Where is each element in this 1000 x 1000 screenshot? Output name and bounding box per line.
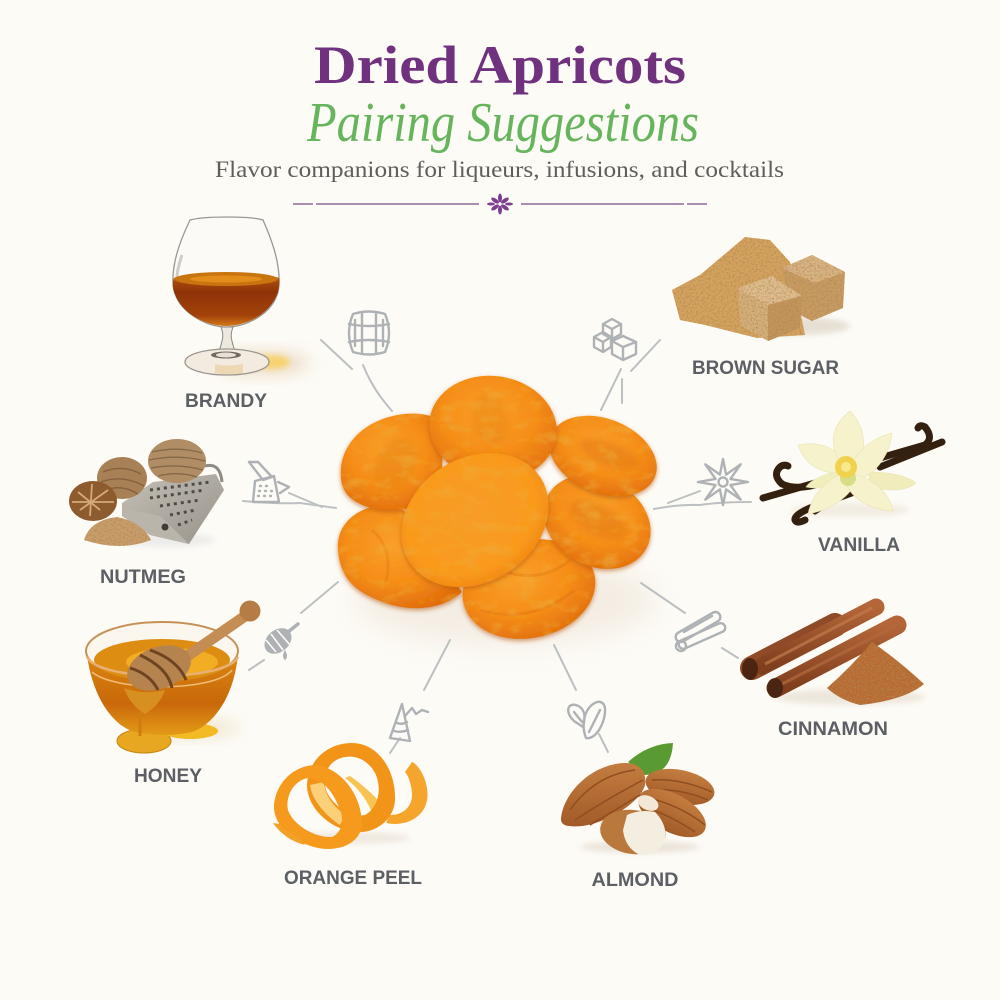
connector lines [243,340,751,753]
ornamental divider [293,194,707,214]
icon: sugar cubes [594,319,636,360]
vanilla pods [763,426,942,522]
front loop [274,765,362,849]
almond back right [642,763,718,811]
apricot: top [422,368,564,488]
nutmeg powder [84,517,151,546]
brown sugar [672,237,850,341]
vanilla petals [798,411,916,514]
label: almond: ALMOND [592,870,678,891]
grater [205,465,222,482]
apricot: upper right [537,401,669,511]
sugar cube front [738,276,802,341]
stem [219,327,235,351]
flower centre [835,456,857,486]
honey bowl [86,600,260,753]
label: orange peel: ORANGE PEEL [284,868,422,889]
central dried apricots [338,368,669,651]
cinnamon sticks and powder [742,607,925,705]
base [185,349,269,375]
icon: honey dipper [259,623,298,660]
nutmeg and grater [69,439,224,547]
powder [827,642,924,705]
sugar cube right [782,255,845,321]
label: nutmeg: NUTMEG [100,567,186,588]
label: honey: HONEY [134,766,202,787]
brandy glass [173,217,310,375]
almond large [561,763,645,826]
tagline: Flavor companions for liqueurs, infusions, and cocktails [215,157,784,183]
back loop [307,743,395,832]
glass bowl [173,217,279,327]
brandy liquid [173,274,279,326]
sugar pile [672,237,805,338]
title: Dried Apricots [314,35,686,95]
wooden dipper [186,614,248,657]
apricot: lower middle [453,527,605,651]
icon: star anise [698,459,748,505]
icon: barrel [349,312,389,354]
almonds [561,743,718,858]
apricot: lower left [338,505,462,608]
label: brandy: BRANDY [185,391,267,412]
subtitle script heading: Pairing Suggestions [306,92,699,154]
label: vanilla: VANILLA [818,535,900,556]
icon: nutmeg grater [249,462,289,502]
vanilla flower and pods [763,411,942,522]
almond front right [630,779,714,847]
icon: cinnamon sticks [674,610,727,651]
apricot: upper left [341,414,445,510]
icon: citrus cone [390,704,428,741]
nutmeg nuts [97,439,206,499]
icon: almond leaves [568,702,605,738]
apricot: lower right [527,457,667,587]
orange peel [273,743,428,849]
bowl [87,655,238,735]
label: cinnamon: CINNAMON [778,719,888,740]
apricot: front [376,426,574,614]
label: brown sugar: BROWN SUGAR [692,358,839,379]
tail curl [386,762,428,824]
leaf [628,743,673,775]
almond cut [597,806,669,858]
spilled honey [117,729,171,753]
sticks [752,625,835,668]
